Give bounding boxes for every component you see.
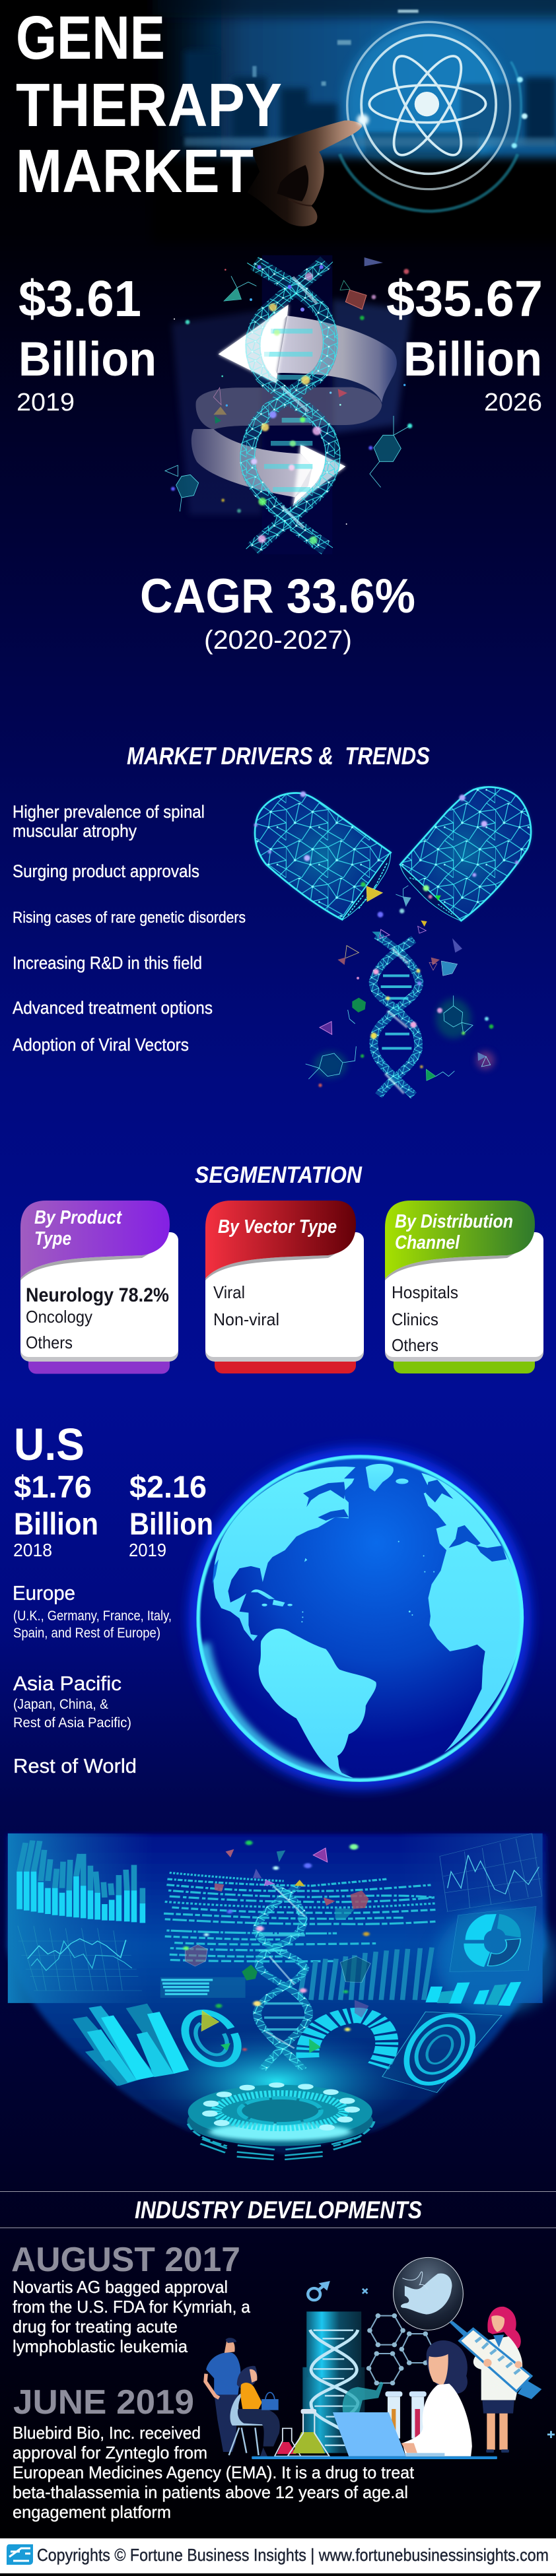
icon: pointing hand bbox=[247, 114, 369, 226]
heading: industry developments: INDUSTRY DEVELOPMENTS bbox=[135, 2196, 422, 2224]
card: by distribution channel: Hospitals bbox=[392, 1282, 458, 1302]
sparkle mark bbox=[547, 2431, 555, 2438]
illustration: holographic data dashboard bbox=[8, 1833, 556, 2160]
card: by distribution channel bbox=[385, 1201, 543, 1373]
market size 2026: $35.67 bbox=[386, 271, 543, 327]
card: by vector type: Non-viral bbox=[213, 1309, 279, 1329]
doctor with syringe bbox=[449, 2307, 541, 2453]
drivers list: Increasing R&D in this field bbox=[13, 953, 202, 973]
sparks on helix bbox=[251, 265, 324, 545]
market size 2019 bbox=[17, 271, 156, 416]
header image: finger touching atom hologram bbox=[153, 0, 556, 242]
molecule nodes bbox=[366, 2313, 428, 2385]
development: June 2019 bbox=[13, 2383, 415, 2522]
drivers list: Adoption of Viral Vectors bbox=[13, 1035, 189, 1055]
floor line bbox=[252, 2457, 497, 2459]
regions list: (Japan, China, & bbox=[13, 1697, 108, 1712]
card: by vector type bbox=[205, 1201, 364, 1373]
illustration: scientists and DNA lab bbox=[205, 2257, 555, 2459]
card: by product type: Oncology bbox=[26, 1307, 92, 1327]
illustration: dashboard DNA helix bbox=[257, 1886, 309, 2070]
scientist seated at laptop bbox=[401, 2340, 472, 2457]
hexagon molecules bbox=[369, 2316, 433, 2383]
title: THERAPY bbox=[16, 71, 282, 139]
card: by product type: Others bbox=[26, 1333, 73, 1352]
data rows bbox=[164, 1872, 435, 1962]
icon: DNA tube bbox=[302, 2311, 365, 2453]
development: June 2019: Bluebird Bio, Inc. received bbox=[13, 2423, 201, 2443]
card: by product type: Neurology 78.2% bbox=[26, 1284, 169, 1306]
card: by distribution channel: Channel bbox=[395, 1232, 460, 1253]
flasks bbox=[275, 2409, 330, 2457]
arrow: top band and head bbox=[219, 305, 397, 403]
card: by product type bbox=[20, 1201, 178, 1374]
illustration: DNA helix with circular arrows bbox=[165, 255, 412, 554]
regions list: Spain, and Rest of Europe) bbox=[13, 1626, 160, 1641]
floating molecules and sparks bbox=[184, 1841, 370, 2051]
capsule sparks bbox=[254, 791, 518, 917]
icon: syringe bbox=[449, 2321, 472, 2340]
inland seas bbox=[212, 1480, 506, 1584]
pale wash of arrows over helix bbox=[219, 305, 289, 383]
drivers list: Surging product approvals bbox=[13, 861, 199, 881]
footer bar bbox=[0, 2538, 556, 2573]
regions list: Europe bbox=[13, 1581, 75, 1604]
regions list: Rest of Asia Pacific) bbox=[13, 1715, 131, 1731]
hologram platform bbox=[188, 2082, 374, 2160]
small DNA helix bbox=[373, 935, 419, 1096]
card: by distribution channel: Others bbox=[392, 1335, 438, 1355]
chart: concentric ring panel bbox=[382, 2010, 502, 2093]
development: June 2019: engagement platform bbox=[13, 2502, 171, 2522]
development: August 2017: from the U.S. FDA for Kymriah, a bbox=[13, 2297, 251, 2317]
chart: small bars right bbox=[425, 1982, 521, 2006]
title: MARKET bbox=[16, 137, 254, 205]
development: June 2019: approval for Zynteglo from bbox=[13, 2443, 207, 2462]
floating molecules bbox=[306, 886, 473, 1079]
regional stats: U.S: 2018 bbox=[13, 1540, 52, 1560]
card: by vector type: By Vector Type bbox=[218, 1216, 337, 1238]
regional stats: U.S bbox=[13, 1419, 213, 1560]
chart: horizontal bars bbox=[160, 1977, 246, 1998]
development: June 2019: beta-thalassemia in patients above 12 years of age.al bbox=[13, 2482, 408, 2502]
chart: ring gauge bbox=[176, 2008, 247, 2069]
regional stats: U.S: $2.16 bbox=[129, 1469, 207, 1504]
chart: donut panel bbox=[450, 1907, 536, 1971]
regional stats: U.S: U.S bbox=[14, 1419, 85, 1470]
regional stats: U.S: Billion bbox=[129, 1506, 213, 1541]
drivers list: muscular atrophy bbox=[13, 821, 137, 841]
icon: Fortune Business Insights logo bbox=[7, 2544, 33, 2565]
chart: line chart right bbox=[440, 1833, 542, 1911]
heading: market drivers: MARKET DRIVERS & TRENDS bbox=[127, 743, 430, 770]
icon: fetus in circle bbox=[394, 2257, 463, 2330]
market size 2019: $3.61 bbox=[18, 271, 141, 327]
middle band of arrow bbox=[196, 387, 382, 430]
chart: bars top left bbox=[20, 1841, 143, 1923]
man and seated woman bbox=[205, 2338, 280, 2457]
chart: line chart left bbox=[18, 1926, 142, 1991]
development: June 2019: European Medicines Agency (EMA). It is a drug to treat bbox=[13, 2462, 415, 2482]
icon: atom bbox=[347, 22, 510, 189]
regions list: (U.K., Germany, France, Italy, bbox=[13, 1608, 172, 1624]
CAGR: CAGR 33.6% bbox=[140, 570, 415, 623]
capsule left half bbox=[255, 793, 391, 919]
development: August 2017 bbox=[11, 2241, 251, 2356]
helix strands bbox=[240, 262, 340, 549]
title: GENE bbox=[16, 3, 165, 72]
development: August 2017: Novartis AG bagged approval bbox=[13, 2277, 228, 2297]
divider band: industry developments bbox=[0, 2191, 556, 2228]
regional stats: U.S: Billion bbox=[14, 1506, 98, 1541]
test tubes bbox=[385, 2391, 427, 2439]
regions list: Rest of World bbox=[13, 1754, 137, 1777]
development: June 2019: JUNE 2019 bbox=[13, 2383, 194, 2422]
chart: bar stripes centre bbox=[300, 1948, 432, 2000]
market size 2026: Billion bbox=[403, 333, 542, 386]
card: by product type: By Product bbox=[34, 1207, 122, 1228]
globe rim glow bbox=[198, 1457, 522, 1780]
CAGR: (2020-2027) bbox=[204, 626, 352, 655]
drivers list bbox=[13, 802, 246, 1055]
card: by distribution channel: Clinics bbox=[392, 1309, 438, 1329]
regions list bbox=[13, 1581, 172, 1777]
drivers list: Rising cases of rare genetic disorders bbox=[13, 909, 246, 927]
icon: male symbol bbox=[308, 2281, 330, 2300]
chart: arc gauge bbox=[308, 2000, 387, 2067]
molecules and floating shapes bbox=[165, 276, 410, 512]
market size 2026 bbox=[386, 271, 543, 416]
market size 2026: 2026 bbox=[484, 389, 542, 416]
heading: segmentation: SEGMENTATION bbox=[195, 1162, 363, 1188]
chart: bars lower left bbox=[73, 2004, 189, 2086]
card: by product type: Type bbox=[34, 1228, 71, 1249]
title bbox=[16, 3, 282, 205]
market size 2019: 2019 bbox=[17, 389, 75, 416]
regional stats: U.S: $1.76 bbox=[14, 1469, 92, 1504]
arrow: bottom band and head bbox=[191, 429, 345, 506]
market size 2019: Billion bbox=[18, 333, 156, 386]
drivers list: Higher prevalence of spinal bbox=[13, 802, 205, 822]
development: August 2017: lymphoblastic leukemia bbox=[13, 2336, 188, 2356]
capsule right half bbox=[400, 787, 531, 921]
continents bbox=[213, 1464, 524, 1778]
regions list: Asia Pacific bbox=[13, 1672, 122, 1695]
illustration: open capsule with DNA bbox=[254, 787, 531, 1096]
card: by distribution channel: By Distribution bbox=[395, 1211, 513, 1232]
icon: globe bbox=[188, 1447, 532, 1790]
icon: small cross mark bbox=[363, 2289, 368, 2294]
card: by vector type: Viral bbox=[213, 1282, 245, 1302]
development: August 2017: AUGUST 2017 bbox=[11, 2241, 240, 2279]
regional stats: U.S: 2019 bbox=[129, 1540, 166, 1560]
CAGR bbox=[140, 570, 415, 655]
development: August 2017: drug for treating acute bbox=[13, 2317, 178, 2336]
laptop bbox=[333, 2412, 406, 2457]
drivers list: Advanced treatment options bbox=[13, 998, 213, 1018]
small researcher bbox=[343, 2381, 384, 2414]
